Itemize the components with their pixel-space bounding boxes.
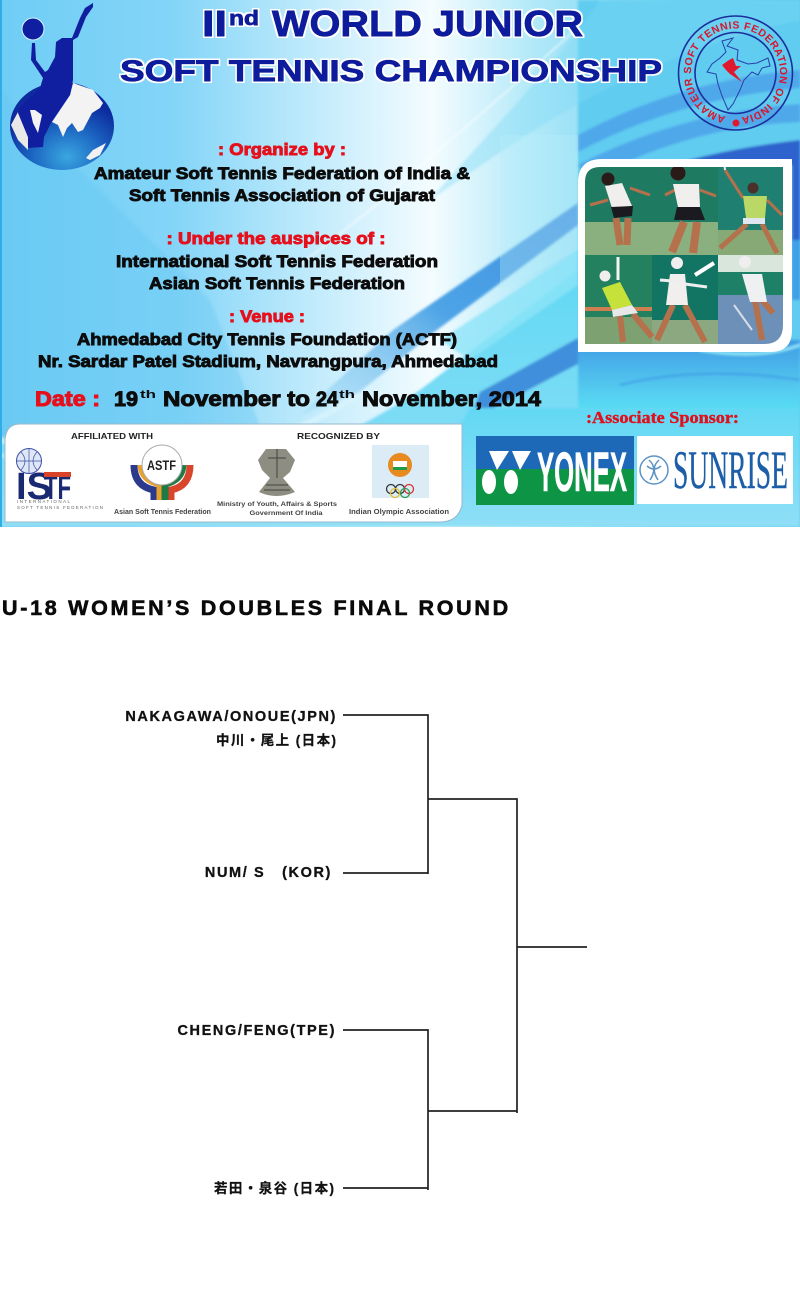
entry: Nakagawa/Onoue xyxy=(125,709,337,748)
entry: Cheng/Feng: CHENG/FENG(TPE) xyxy=(177,1023,336,1039)
bracket: final round xyxy=(343,715,587,1190)
heading: final round: U-18 WOMEN’S DOUBLES FINAL ROUND xyxy=(2,596,511,620)
organizers block: Asian Soft Tennis Federation xyxy=(149,274,405,293)
logo: indian olympic association: Indian Olympic Association xyxy=(349,507,449,516)
date line: November to xyxy=(163,388,310,411)
logo: istf: INTERNATIONAL xyxy=(17,499,70,504)
text: YONEX xyxy=(537,440,627,503)
title: nd xyxy=(229,8,259,30)
heading: recognized by: RECOGNIZED BY xyxy=(297,431,380,441)
entry: Nakagawa/Onoue: NAKAGAWA/ONOUE(JPN) xyxy=(125,709,337,725)
logo: istf: TF xyxy=(44,469,71,507)
date line xyxy=(35,388,541,411)
date line: Date : xyxy=(35,388,100,411)
logo: istf: IS xyxy=(16,466,52,508)
heading: affiliated with: AFFILIATED WITH xyxy=(71,431,153,441)
organizers block: Soft Tennis Association of Gujarat xyxy=(129,186,435,205)
player 5 xyxy=(657,257,714,342)
logo: indian olympic association xyxy=(349,445,449,516)
date line: th xyxy=(140,389,156,401)
player 6 xyxy=(734,256,773,340)
organizers block: : Organize by : xyxy=(218,140,346,159)
entry: Wakata/Izumiya: 若田・泉谷 (日本) xyxy=(214,1180,334,1196)
logo: astf xyxy=(114,445,211,516)
title: SOFT TENNIS CHAMPIONSHIP xyxy=(120,55,662,88)
player 4 xyxy=(600,257,652,342)
organizers block: : Under the auspices of : xyxy=(166,229,386,248)
logo: india emblem xyxy=(217,449,337,517)
logo: india emblem: Government Of India xyxy=(250,510,323,517)
logo: astf: Asian Soft Tennis Federation xyxy=(114,507,211,516)
title: II xyxy=(202,3,227,44)
date line: th xyxy=(339,389,355,401)
logo: sunrise xyxy=(637,436,793,504)
organizers block: International Soft Tennis Federation xyxy=(116,252,438,271)
organizers block xyxy=(38,140,498,371)
photo panel: players xyxy=(578,152,792,352)
logo: india emblem: Ministry of Youth, Affairs & Sports xyxy=(217,501,337,508)
date line: 24 xyxy=(316,388,338,411)
title xyxy=(120,3,662,88)
organizers block: : Venue : xyxy=(229,307,305,326)
organizers block: Amateur Soft Tennis Federation of India & xyxy=(94,164,470,183)
logo: istf: SOFT TENNIS FEDERATION xyxy=(17,505,103,510)
panel: affiliated and recognized logos xyxy=(5,424,462,522)
entry: Num/S: NUM/ S (KOR) xyxy=(205,865,332,881)
logo: federation seal: AMATEUR SOFT TENNIS FEDERATION OF INDIA xyxy=(684,21,788,124)
logo: astf: ASTF xyxy=(147,457,176,473)
organizers block: Ahmedabad City Tennis Foundation (ACTF) xyxy=(77,330,457,349)
logo: yonex xyxy=(476,436,634,505)
player 2 xyxy=(665,166,716,253)
logo: globe with player silhouette xyxy=(10,3,114,170)
logo: istf xyxy=(16,448,103,510)
organizers block: Nr. Sardar Patel Stadium, Navrangpura, Ahmedabad xyxy=(38,352,498,371)
associate sponsor label: :Associate Sponsor: xyxy=(586,408,739,427)
date line: 19 xyxy=(114,388,138,411)
entry: Nakagawa/Onoue: 中川・尾上 (日本) xyxy=(216,732,336,748)
player 3 xyxy=(718,167,783,254)
player 1 xyxy=(590,172,650,245)
date line: November, 2014 xyxy=(362,388,541,411)
title: WORLD JUNIOR xyxy=(272,3,583,44)
banner: championship header xyxy=(0,0,800,527)
